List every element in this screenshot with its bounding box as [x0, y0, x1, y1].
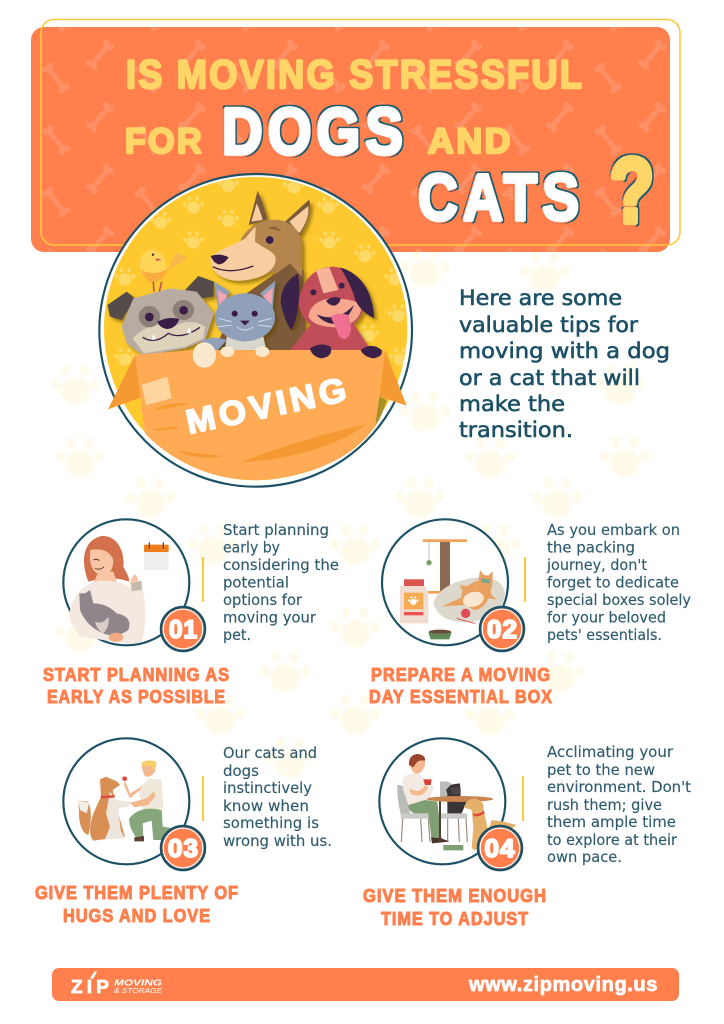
footer bar [52, 968, 679, 1001]
step 01 description: Start planning [223, 521, 329, 539]
step 01 heading: START PLANNING AS [43, 665, 230, 685]
step 04 description: them ample time [547, 813, 676, 831]
pug [107, 276, 214, 356]
step 02 number badge: 02 [487, 616, 518, 644]
title heading: AND [428, 122, 513, 161]
intro text: or a cat that will [459, 366, 640, 390]
grey cat [199, 281, 275, 353]
step 03 panel [35, 738, 332, 926]
step 02 description: for your beloved [547, 609, 666, 627]
title banner [31, 20, 680, 252]
step 01 heading [43, 665, 230, 707]
step 04 panel [363, 738, 691, 929]
step 01 description: moving your [223, 609, 317, 627]
step 02 number badge [480, 607, 524, 651]
step 02 heading: PREPARE A MOVING [371, 665, 551, 685]
background paw prints [50, 248, 650, 782]
big brown dog [211, 191, 310, 350]
step 02 description: the packing [547, 539, 635, 557]
step 03 description: wrong with us. [223, 832, 332, 850]
step 03 description: dogs [223, 762, 259, 780]
step 04 divider [522, 776, 524, 821]
title heading [125, 53, 654, 242]
step 02 divider [524, 557, 526, 602]
yellow disc with paws [100, 173, 413, 487]
step 03 description: Our cats and [223, 744, 317, 762]
title heading: FOR [125, 122, 204, 161]
step 01 panel [43, 519, 339, 707]
step 01 description [223, 521, 339, 644]
step 04 description: to explore at their [547, 831, 678, 849]
title heading: DOGS [222, 94, 408, 168]
intro text: make the [459, 392, 565, 416]
step 04 illustration: man at table with pets [379, 738, 517, 864]
step 01 description: pet. [223, 626, 251, 644]
step 04 description: rush them; give [547, 796, 662, 814]
step 03 number badge: 03 [168, 835, 199, 863]
step 04 heading: TIME TO ADJUST [381, 909, 529, 929]
step 04 description [547, 743, 691, 866]
step 01 description: potential [223, 574, 289, 592]
hero illustration: pets in moving box [99, 173, 413, 487]
step 01 illustration: woman holding cat [63, 519, 189, 645]
step 03 description [223, 744, 332, 850]
step 01 divider [202, 557, 204, 602]
step 02 description: forget to dedicate [547, 574, 679, 592]
step 04 number badge: 04 [484, 835, 516, 863]
step 03 heading: HUGS AND LOVE [63, 906, 211, 926]
step 01 description: considering the [223, 556, 339, 574]
logo: ZIP [71, 976, 113, 997]
bird [140, 249, 188, 292]
title heading: ? [610, 140, 654, 242]
step 02 heading [369, 665, 553, 707]
logo: MOVING [114, 978, 162, 988]
step 02 heading: DAY ESSENTIAL BOX [369, 687, 553, 707]
step 01 description: early by [223, 539, 280, 557]
step 02 description: journey, don't [546, 556, 647, 574]
cardboard box [108, 350, 407, 480]
step 03 number badge [161, 826, 205, 870]
step 04 description: environment. Don't [547, 778, 691, 796]
step 02 description [546, 521, 691, 644]
intro text: Here are some [459, 286, 622, 310]
step 04 number badge [478, 826, 522, 870]
step 03 divider [202, 776, 204, 821]
step 04 description: pet to the new [547, 761, 655, 779]
intro text: valuable tips for [459, 313, 638, 337]
step 02 description: As you embark on [547, 521, 680, 539]
intro text: transition. [459, 418, 573, 442]
intro text [459, 286, 670, 442]
intro text: moving with a dog [459, 339, 670, 363]
paws resting on box edge [193, 342, 382, 368]
step 02 description: pets' essentials. [547, 626, 662, 644]
title heading: CATS [418, 160, 584, 234]
logo: & STORAGE [114, 988, 162, 995]
title heading: IS MOVING STRESSFUL [126, 53, 584, 97]
step 01 number badge: 01 [169, 616, 198, 644]
step 03 description: instinctively [223, 779, 312, 797]
step 01 description: options for [223, 591, 303, 609]
step 04 heading: GIVE THEM ENOUGH [363, 886, 547, 906]
step 03 heading [35, 883, 239, 926]
step 03 illustration: man and dog [63, 738, 189, 864]
step 03 heading: GIVE THEM PLENTY OF [35, 883, 239, 903]
red dog [281, 267, 377, 352]
step 03 description: something is [223, 814, 319, 832]
step 02 description: special boxes solely [547, 591, 691, 609]
step 04 heading [363, 886, 547, 929]
step 01 number badge [161, 607, 205, 651]
step 04 description: Acclimating your [547, 743, 674, 761]
step 03 description: know when [223, 797, 309, 815]
logo [71, 971, 162, 997]
cardboard box: MOVING [183, 370, 354, 442]
step 02 illustration: cat bed and supplies [382, 519, 508, 645]
step 02 panel [369, 519, 691, 707]
website url: www.zipmoving.us [468, 974, 658, 996]
step 04 description: own pace. [547, 848, 622, 866]
step 01 heading: EARLY AS POSSIBLE [47, 687, 226, 707]
